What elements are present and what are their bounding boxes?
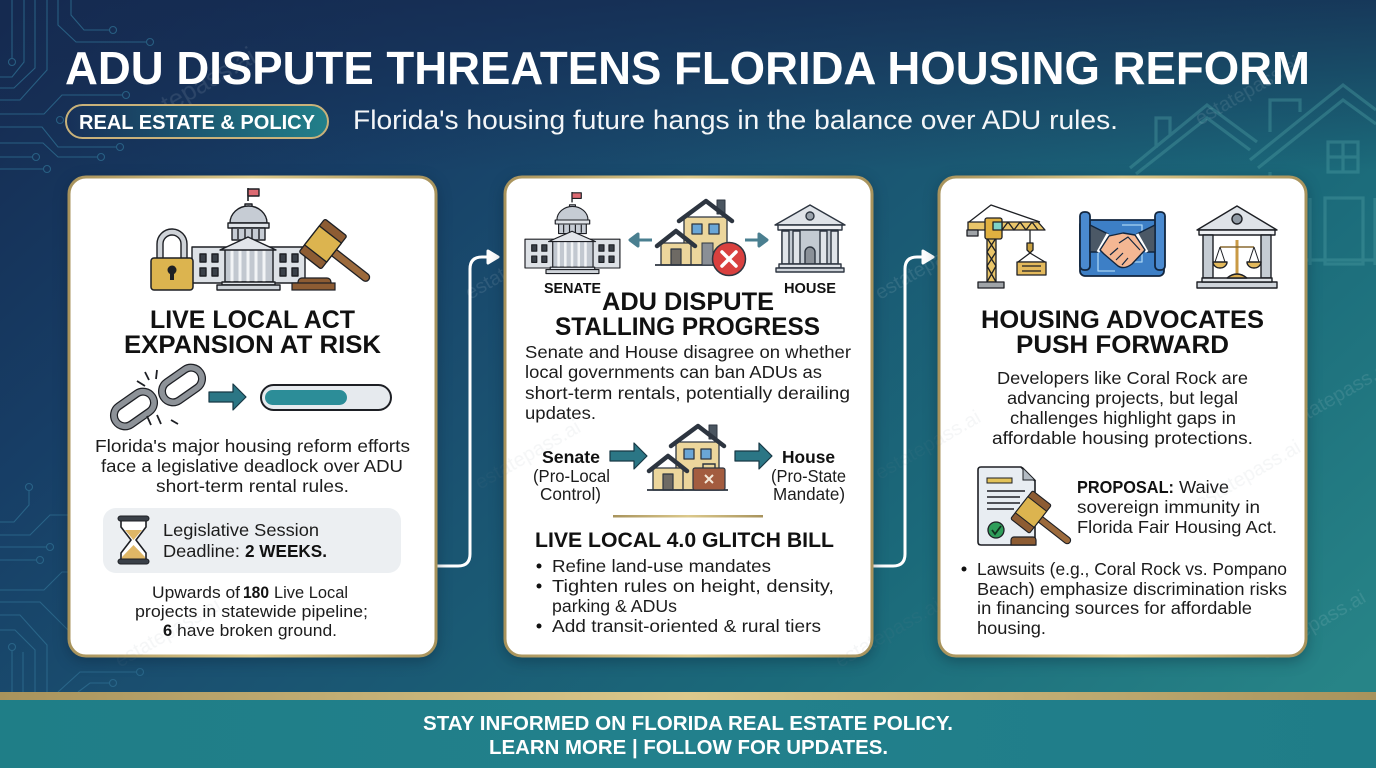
heading	[124, 306, 381, 359]
panel: live local act expansion at risk	[69, 177, 436, 656]
background house outlines	[1130, 85, 1376, 265]
icon: document with gavel	[978, 467, 1081, 556]
subtitle: Florida's housing future hangs in the balance over ADU rules.	[353, 105, 1118, 135]
heading	[555, 288, 820, 341]
arrow: card 2 to card 3	[873, 251, 933, 566]
list: glitch bill items: Tighten rules on height, density,	[552, 576, 834, 596]
icon: padlock, capitol and gavel	[151, 188, 382, 296]
icon: house of representatives building	[775, 205, 845, 272]
list: glitch bill items: parking & ADUs	[552, 596, 677, 616]
text: dispute description	[525, 342, 851, 423]
text: project pipeline	[135, 584, 368, 640]
panel: housing advocates push forward	[939, 177, 1306, 656]
icon: handshake on blueprint	[1080, 212, 1165, 276]
list: glitch bill items: Refine land-use mandates	[552, 556, 771, 576]
heading: PUSH FORWARD	[1016, 331, 1229, 359]
text: deadlock summary: short-term rental rules.	[156, 476, 349, 496]
card watermarks: estatepass.ai	[472, 416, 585, 494]
title: ADU DISPUTE THREATENS FLORIDA HOUSING REFORM	[65, 42, 1310, 94]
list: lawsuits	[962, 559, 1287, 638]
footer	[0, 692, 1376, 768]
icon: senate capitol	[525, 192, 620, 274]
list: lawsuits: Beach) emphasize discrimination risks	[977, 579, 1287, 599]
background watermarks: estatepass.ai	[462, 226, 575, 304]
text: developers summary: Developers like Coral Rock are	[997, 368, 1248, 388]
icon: broken chain	[110, 363, 206, 431]
heading: HOUSING ADVOCATES	[981, 306, 1264, 334]
background watermarks: estatepass.ai	[113, 41, 261, 143]
text: deadline: Legislative Session	[163, 520, 319, 540]
card watermarks: estatepass.ai	[872, 406, 985, 484]
background watermarks: estatepass.ai	[1192, 52, 1305, 130]
text: proposal: PROPOSAL:	[1077, 477, 1174, 497]
label: house: HOUSE	[784, 281, 836, 297]
icon: left arrow	[630, 234, 652, 246]
footer: LEARN MORE | FOLLOW FOR UPDATES.	[489, 737, 888, 759]
progress bar	[261, 385, 391, 410]
text: deadline: Deadline:	[163, 541, 240, 561]
heading: EXPANSION AT RISK	[124, 331, 381, 359]
text: developers summary: challenges highlight gaps in	[1010, 408, 1236, 428]
text: project pipeline: Upwards of	[152, 584, 240, 602]
text: developers summary: affordable housing protections.	[992, 428, 1253, 448]
text: dispute description: updates.	[525, 403, 596, 423]
list: glitch bill items: Add transit-oriented & rural tiers	[552, 616, 821, 636]
icon: house with suitcase	[647, 425, 728, 490]
icon: right arrow	[745, 234, 767, 246]
text: project pipeline: have broken ground.	[177, 622, 337, 640]
label: senate position: Control)	[540, 484, 601, 504]
text: proposal: Florida Fair Housing Act.	[1077, 517, 1277, 537]
text: deadline: 2 WEEKS.	[245, 541, 327, 561]
background watermarks	[113, 41, 1376, 664]
card watermarks: estatepass.ai	[1192, 436, 1305, 514]
label: senate position: Senate	[542, 447, 600, 467]
callout: session deadline	[103, 508, 401, 573]
background watermarks: estatepass.ai	[872, 226, 985, 304]
category pill	[66, 105, 328, 138]
arrow: card 1 to card 2	[437, 251, 498, 566]
heading: LIVE LOCAL ACT	[150, 306, 355, 334]
list: lawsuits: in financing sources for affordable	[977, 598, 1252, 618]
text: project pipeline: 180	[243, 584, 269, 602]
arrow: chain to progress bar	[209, 384, 246, 410]
list: glitch bill items	[536, 556, 834, 636]
label: house position: House	[782, 447, 835, 467]
label: house position: Mandate)	[773, 484, 845, 504]
footer: STAY INFORMED ON FLORIDA REAL ESTATE POLICY.	[423, 713, 953, 735]
text: deadlock summary	[95, 436, 410, 496]
text: proposal: Waive	[1179, 477, 1229, 497]
text: developers summary: advancing projects, but legal	[1007, 388, 1238, 408]
background watermarks: estatepass.ai	[1256, 586, 1370, 664]
icon: hourglass	[118, 516, 149, 564]
category pill: REAL ESTATE & POLICY	[79, 112, 316, 134]
text: deadlock summary: face a legislative deadlock over ADU	[101, 456, 403, 476]
text: dispute description: Senate and House disagree on whether	[525, 342, 851, 362]
text: developers summary	[992, 368, 1253, 448]
text: project pipeline: 6	[163, 622, 172, 640]
list: lawsuits: Lawsuits (e.g., Coral Rock vs. Pompano	[977, 559, 1287, 579]
text: proposal: sovereign immunity in	[1077, 497, 1260, 517]
panel: adu dispute stalling progress	[505, 177, 872, 656]
background circuit pattern	[0, 0, 154, 692]
label: senate position	[533, 447, 610, 504]
label: senate position: (Pro-Local	[533, 466, 610, 486]
card watermarks: estatepass.ai	[112, 594, 225, 672]
label: senate: SENATE	[544, 281, 601, 297]
text: dispute description: local governments can ban ADUs as	[525, 362, 822, 382]
icon: house with red cross	[655, 200, 746, 276]
text: deadlock summary: Florida's major housing reform efforts	[95, 436, 410, 456]
icon: construction crane	[967, 205, 1046, 288]
icon: courthouse with scales	[1197, 206, 1277, 288]
text: project pipeline: Live Local	[274, 584, 348, 602]
heading: glitch bill: LIVE LOCAL 4.0 GLITCH BILL	[535, 528, 834, 552]
text: project pipeline: projects in statewide pipeline;	[135, 603, 368, 621]
label: house position	[771, 447, 846, 504]
text: dispute description: short-term rentals, potentially derailing	[525, 383, 850, 403]
arrow: senate to house icon	[610, 443, 647, 469]
heading: ADU DISPUTE	[602, 288, 774, 316]
text: deadline	[163, 520, 327, 561]
card watermarks	[112, 406, 1305, 672]
arrow: house icon to house	[735, 443, 772, 469]
heading: STALLING PROGRESS	[555, 313, 820, 341]
list: lawsuits: housing.	[977, 618, 1046, 638]
heading	[981, 306, 1264, 359]
card watermarks: estatepass.ai	[832, 594, 945, 672]
label: house position: (Pro-State	[771, 466, 846, 486]
text: proposal	[1077, 477, 1277, 537]
